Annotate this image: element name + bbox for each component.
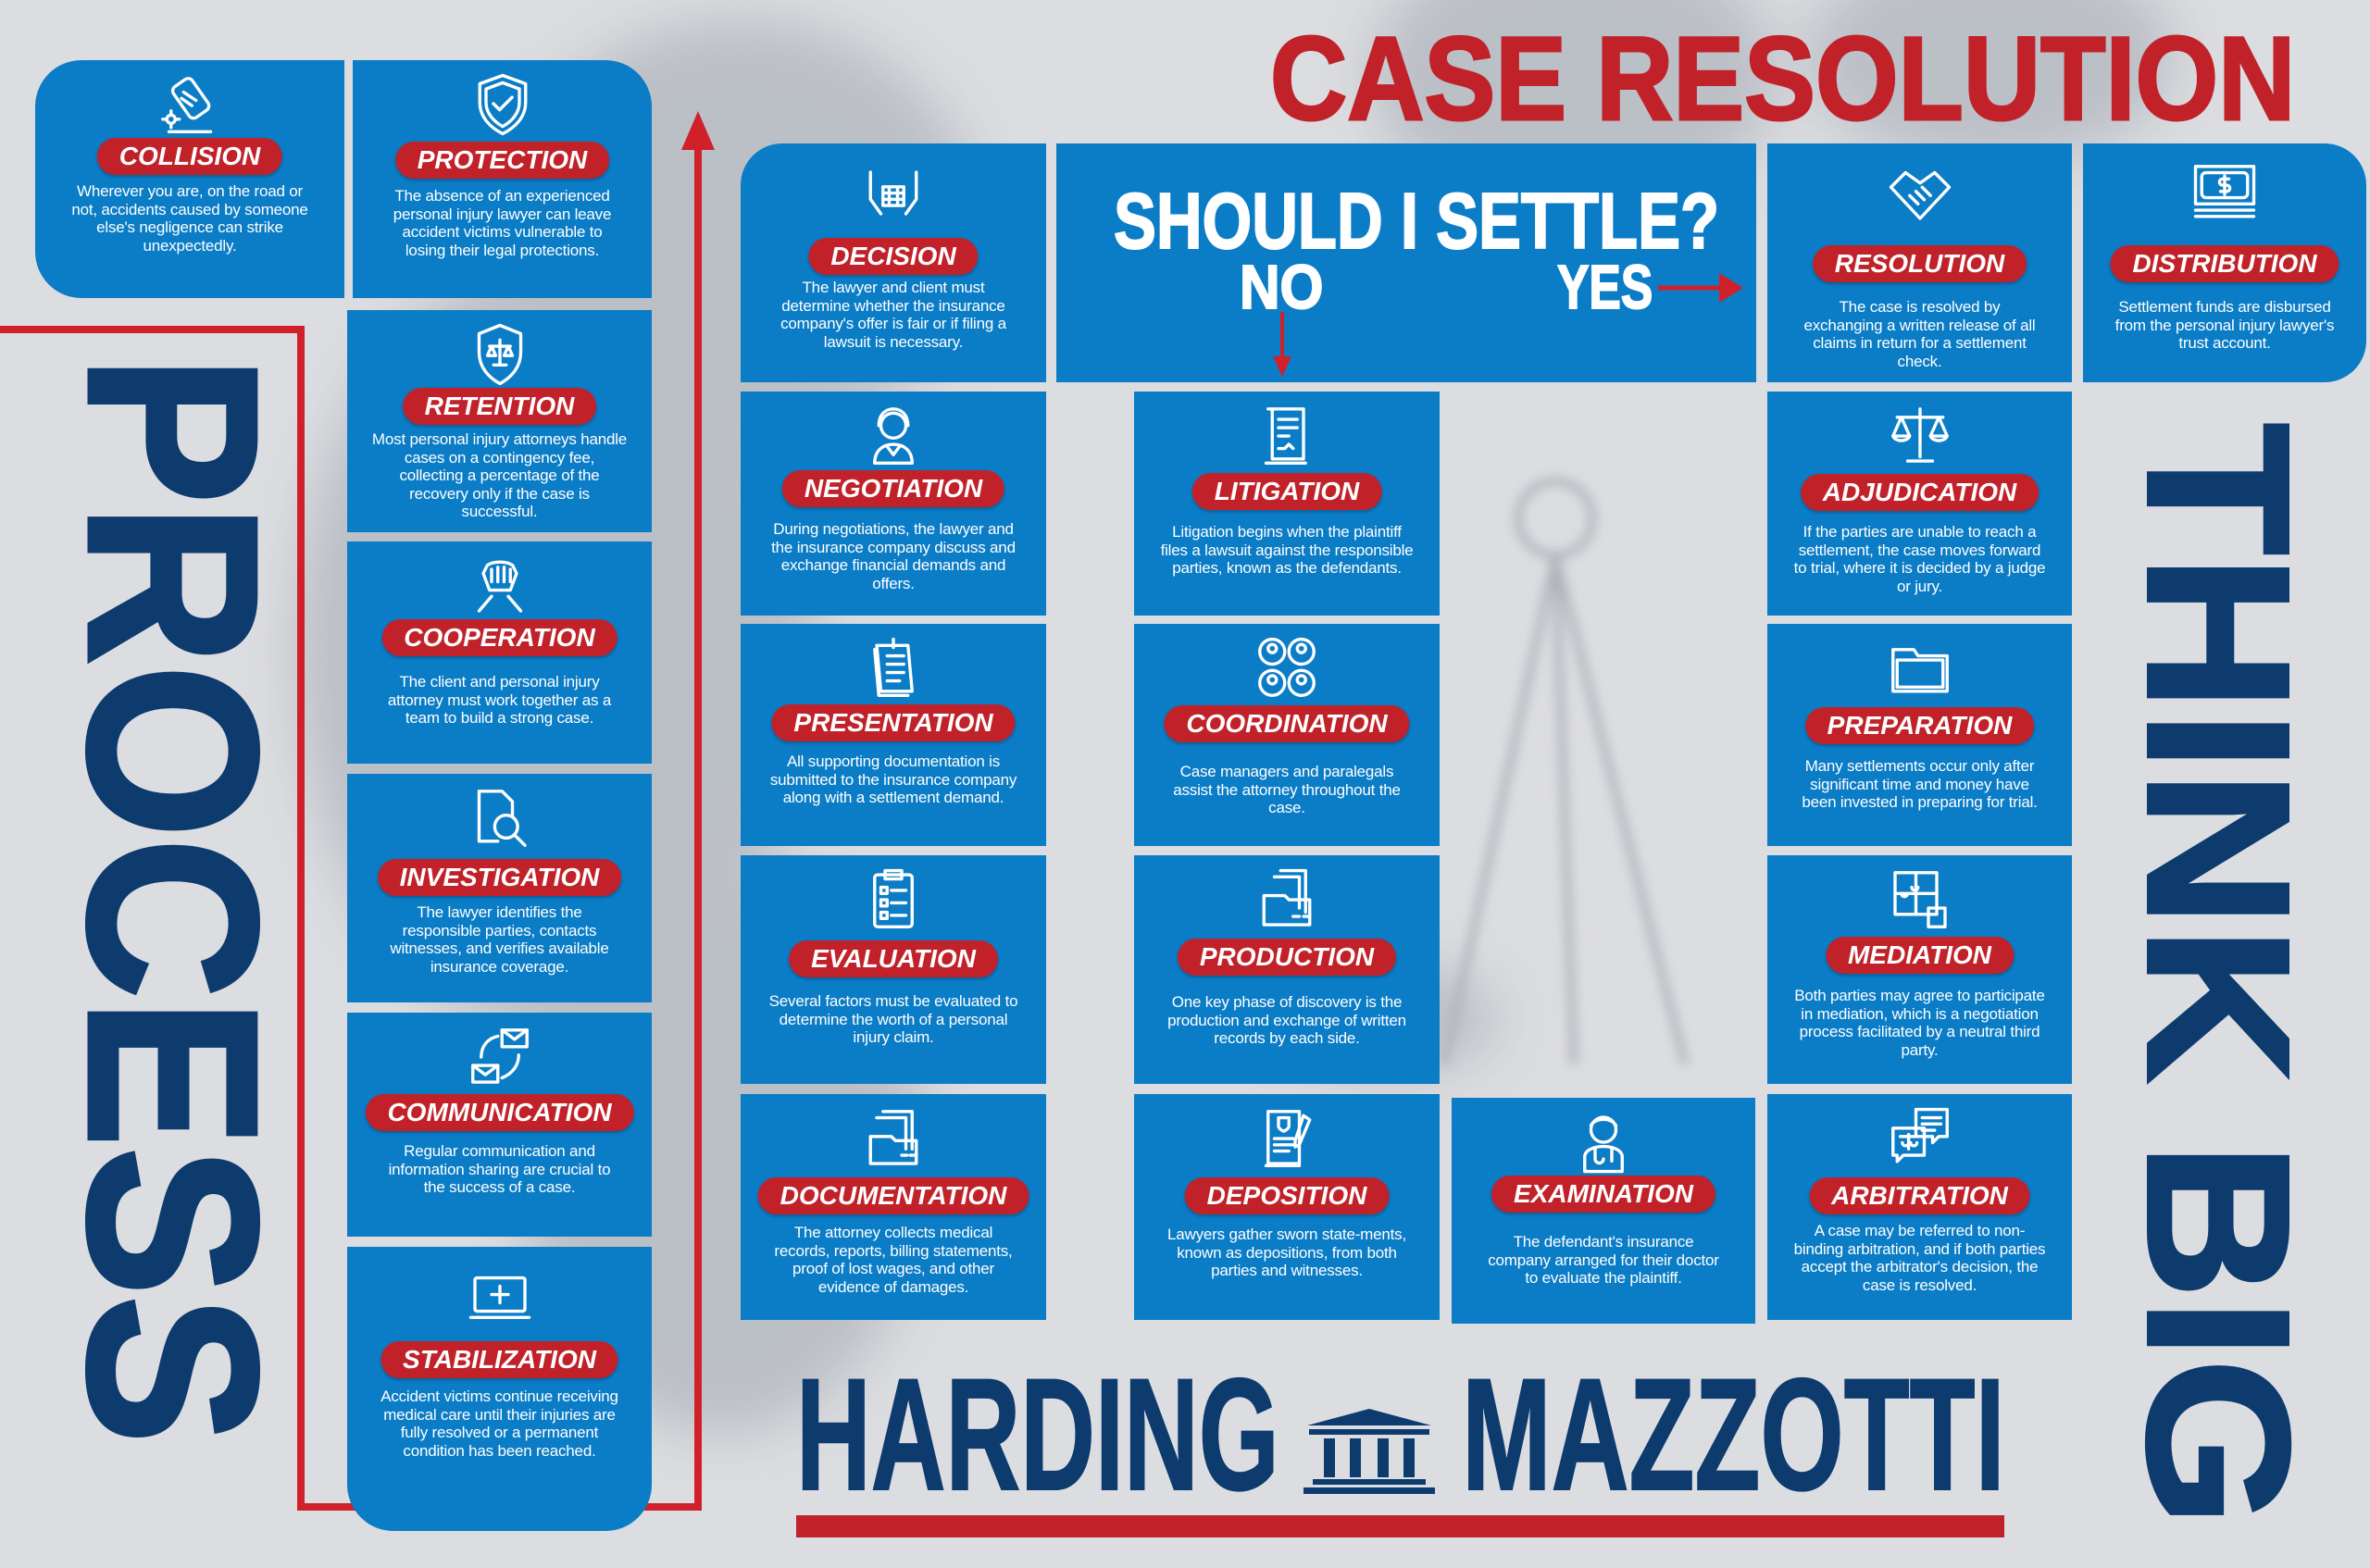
card: production (1134, 855, 1440, 1084)
card: stabilization (347, 1247, 652, 1531)
text: resolution: The case is resolved by exchanging a written release of all claims in return for a settlement check. (1803, 298, 2036, 370)
pill: adjudication: ADJUDICATION (1823, 478, 2016, 506)
card: resolution (1767, 143, 2072, 382)
icon: handshake (1889, 170, 1952, 220)
pill: mediation: MEDIATION (1848, 940, 1991, 969)
logo underline (796, 1515, 2004, 1537)
text: litigation: Litigation begins when the plaintiff files a lawsuit against the responsible parties, known as the defendants. (1161, 523, 1413, 577)
icon: clipboard checklist (873, 868, 914, 928)
pill: presentation: PRESENTATION (793, 708, 993, 737)
pill: collision: COLLISION (119, 142, 260, 170)
pill: deposition (1185, 1177, 1389, 1214)
icon: scale (1891, 407, 1949, 463)
card: evaluation (741, 855, 1046, 1084)
text: stabilization: Accident victims continue receiving medical care until their injuries are fully resolved or a permanent condition has been reached. (380, 1388, 618, 1460)
pill: distribution (2110, 245, 2339, 282)
text: communication: Regular communication and information sharing are crucial to the success of a case. (389, 1142, 610, 1196)
card: examination (1452, 1098, 1755, 1324)
icon: envelopes (471, 1028, 529, 1084)
text: documentation: The attorney collects medical records, reports, billing statements, proof of lost wages, and other evidence of damages. (774, 1224, 1013, 1296)
card: cooperation (347, 541, 652, 764)
text: adjudication: If the parties are unable to reach a settlement, the case moves forward to trial, where it is decided by a judge or jury. (1794, 523, 2045, 595)
icon: shield check (478, 74, 528, 135)
pill: litigation: LITIGATION (1215, 477, 1359, 505)
pill: preparation (1805, 707, 2034, 744)
pill: communication: COMMUNICATION (387, 1098, 612, 1126)
icon: handshake (478, 561, 522, 613)
pill: protection (395, 142, 609, 179)
pill: retention (403, 388, 596, 425)
pill: examination (1491, 1176, 1715, 1213)
pill: production (1178, 939, 1396, 976)
pill: presentation (771, 704, 1016, 741)
pill: documentation: DOCUMENTATION (780, 1181, 1006, 1210)
icon: car crash (161, 77, 213, 133)
card: presentation (741, 624, 1046, 846)
label: NO: NO (1240, 253, 1323, 322)
text: arbitration: A case may be referred to non-binding arbitration, and if both parties accept the arbitrator's decision, the case is resolved. (1794, 1222, 2045, 1294)
card: collision (35, 60, 344, 298)
card: communication (347, 1013, 652, 1237)
logo text: MAZZOTTI: MAZZOTTI (1462, 1346, 2005, 1524)
card: protection (353, 60, 652, 298)
icon: team network (1258, 637, 1316, 697)
heading: should I settle: SHOULD I SETTLE? (1114, 178, 1719, 266)
text: distribution: Settlement funds are disbursed from the personal injury lawyer's trust account. (2115, 298, 2334, 352)
text: investigation: The lawyer identifies the responsible parties, contacts witnesses, and verifies available insurance coverage. (390, 903, 609, 976)
icon: document pen (1265, 1110, 1311, 1167)
pill: coordination (1164, 705, 1410, 742)
text: deposition: Lawyers gather sworn state-ments, known as depositions, from both parties and witnesses. (1167, 1226, 1406, 1279)
card: documentation (741, 1094, 1046, 1320)
pill: distribution: DISTRIBUTION (2132, 249, 2317, 278)
text: coordination: Case managers and paralegals assist the attorney throughout the case. (1173, 763, 1401, 816)
text: presentation: All supporting documentation is submitted to the insurance company along with a settlement demand. (770, 753, 1017, 806)
text: mediation: Both parties may agree to participate in mediation, which is a negotiation process facilitated by a neutral third party. (1794, 987, 2045, 1059)
pill: mediation (1826, 937, 2014, 974)
card: negotiation (741, 392, 1046, 616)
pill: retention: RETENTION (425, 392, 574, 420)
card: decision (741, 143, 1046, 382)
text: retention: Most personal injury attorneys handle cases on a contingency fee, collecting a percentage of the recovery only if the case is successful. (372, 430, 627, 520)
icon: folder (1891, 648, 1949, 692)
icon: shield scale (478, 324, 522, 385)
pill: decision: DECISION (830, 242, 956, 270)
text: examination: The defendant's insurance company arranged for their doctor to evaluate the plaintiff. (1488, 1233, 1719, 1287)
pill: evaluation: EVALUATION (811, 944, 976, 973)
pill: investigation: INVESTIGATION (400, 863, 599, 891)
logo: Harding Mazzotti (796, 1346, 2005, 1537)
pill: litigation (1192, 473, 1381, 510)
icon: scroll document (1265, 407, 1307, 465)
vertical title: THINK BIG: THINK BIG (2105, 423, 2330, 1526)
arrow: down from NO (1273, 312, 1291, 377)
icon: doctor (1583, 1115, 1624, 1174)
pill: arbitration: ARBITRATION (1831, 1181, 2008, 1210)
text: protection: The absence of an experienced personal injury lawyer can leave accident victims vulnerable to losing their legal protections. (393, 187, 611, 259)
vertical title: PROCESS: PROCESS (38, 355, 306, 1444)
card: arbitration (1767, 1094, 2072, 1320)
logo text: HARDING: HARDING (796, 1346, 1279, 1524)
arrow: right from YES (1658, 273, 1743, 303)
pill: negotiation: NEGOTIATION (805, 474, 982, 503)
card: retention (347, 310, 652, 532)
card: preparation (1767, 624, 2072, 846)
pill: deposition: DEPOSITION (1207, 1181, 1366, 1210)
icon: courthouse (1304, 1409, 1435, 1494)
card: adjudication (1767, 392, 2072, 616)
card: investigation (347, 774, 652, 1002)
pill: communication (365, 1094, 634, 1131)
text: negotiation: During negotiations, the lawyer and the insurance company discuss and exchange financial demands and offers. (771, 520, 1016, 592)
label: YES: YES (1557, 253, 1653, 322)
pill: negotiation (782, 470, 1004, 507)
icon: files folder (1263, 868, 1311, 927)
card: distribution (2083, 143, 2366, 382)
card: coordination (1134, 624, 1440, 846)
pill: investigation (378, 859, 621, 896)
pill: evaluation (789, 940, 998, 977)
icon: puzzle (1893, 871, 1947, 928)
pill: arbitration (1809, 1177, 2030, 1214)
title: CASE RESOLUTION: CASE RESOLUTION (1270, 13, 2295, 145)
pill: coordination: COORDINATION (1186, 709, 1388, 738)
pill: stabilization: STABILIZATION (403, 1345, 596, 1374)
pill: protection: PROTECTION (418, 145, 587, 174)
text: collision: Wherever you are, on the road or not, accidents caused by someone else's negligence can strike unexpectedly. (71, 182, 308, 255)
icon: files folder (868, 1110, 918, 1165)
pill: documentation (758, 1177, 1029, 1214)
pill: decision (808, 238, 979, 275)
icon: clipboard notes (873, 637, 914, 697)
text: evaluation: Several factors must be evaluated to determine the worth of a personal injury claim. (769, 992, 1017, 1046)
pill: cooperation: COOPERATION (404, 623, 595, 652)
icon: chat scale (1891, 1107, 1949, 1163)
pill: examination: EXAMINATION (1514, 1179, 1693, 1208)
pill: collision (97, 138, 282, 175)
pill: production: PRODUCTION (1200, 942, 1374, 971)
icon: money (2194, 165, 2255, 218)
icon: magnifier document (478, 790, 527, 847)
card: mediation (1767, 855, 2072, 1084)
text: cooperation: The client and personal injury attorney must work together as a team to build a strong case. (388, 673, 611, 727)
icon: person headset (873, 407, 914, 465)
icon: laptop medical (468, 1276, 531, 1319)
pill: stabilization (380, 1341, 618, 1378)
card: litigation (1134, 392, 1440, 616)
text: production: One key phase of discovery is the production and exchange of written records by each side. (1167, 993, 1406, 1047)
icon: hands (868, 170, 918, 216)
pill: preparation: PREPARATION (1827, 711, 2012, 740)
text: decision: The lawyer and client must determine whether the insurance company's offer is fair or if filing a lawsuit is necessary. (780, 279, 1006, 351)
panel: should I settle (1056, 143, 1756, 382)
pill: resolution (1813, 245, 2027, 282)
pill: resolution: RESOLUTION (1835, 249, 2004, 278)
pill: cooperation (381, 619, 617, 656)
text: preparation: Many settlements occur only after significant time and money have been invested in preparing for trial. (1802, 757, 2038, 811)
pill: adjudication (1801, 474, 2039, 511)
card: deposition (1134, 1094, 1440, 1320)
